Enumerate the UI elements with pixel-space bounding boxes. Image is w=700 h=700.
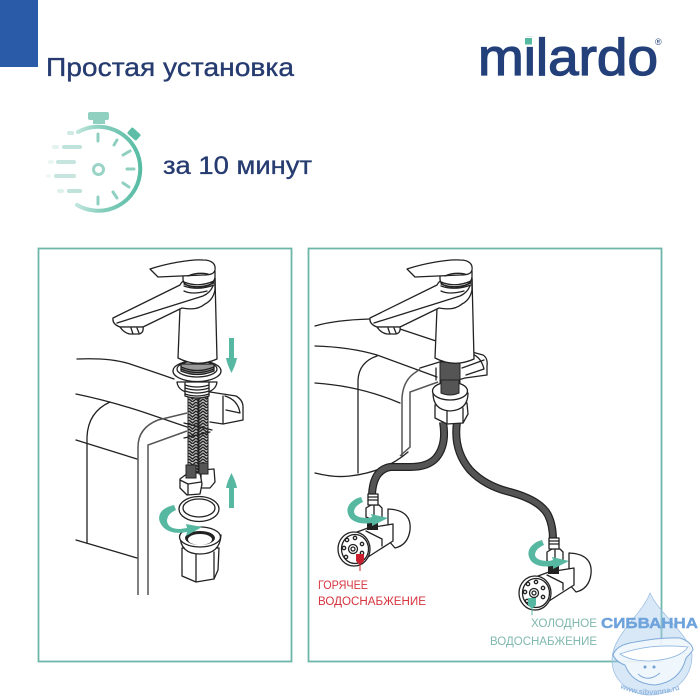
faucet	[113, 260, 217, 363]
connector nut	[432, 380, 468, 424]
arrow: down	[226, 338, 237, 373]
mounting nut	[180, 527, 221, 582]
logo: milardo: ®	[655, 37, 662, 47]
braided hoses	[372, 422, 553, 540]
sink outline	[76, 359, 187, 595]
logo: milardo: milardo	[478, 29, 658, 87]
braided hoses	[184, 397, 212, 473]
marker: hot	[356, 554, 364, 571]
hose nuts	[180, 463, 215, 495]
sink outline	[315, 319, 438, 477]
watermark name: СИБВАННА	[601, 615, 698, 632]
washer ring	[179, 496, 219, 522]
rotation arrow: cold	[528, 540, 569, 569]
label: hot water: ГОРЯЧЕЕ	[318, 580, 368, 592]
label: hot water	[318, 580, 426, 608]
panel: step 2	[308, 248, 662, 662]
valve: hot water	[338, 494, 410, 566]
marker: cold	[528, 598, 536, 615]
label: cold water	[490, 618, 597, 648]
stopwatch caption: за 10 минут	[163, 152, 313, 180]
icon: stopwatch	[48, 112, 141, 211]
blue corner square	[0, 0, 38, 67]
watermark url: www.sibvanna.ru	[620, 684, 680, 694]
title: Простая установка	[46, 52, 295, 82]
watermark tub	[613, 638, 693, 685]
mounting tray	[210, 392, 243, 424]
mounting tray	[420, 352, 487, 380]
label: cold water: ХОЛОДНОЕ	[531, 618, 597, 630]
threaded stem	[177, 382, 217, 398]
rotation arrow	[159, 505, 202, 536]
arrow: up	[226, 473, 237, 508]
flange ring	[173, 360, 221, 382]
panel: step 1	[38, 248, 292, 662]
threaded stem	[440, 362, 460, 390]
label: cold water: ВОДОСНАБЖЕНИЕ	[490, 636, 597, 648]
valve: cold water	[519, 538, 591, 610]
rotation arrow: hot	[347, 497, 388, 526]
faucet	[370, 260, 474, 363]
label: hot water: ВОДОСНАБЖЕНИЕ	[318, 596, 426, 608]
watermark: sibvanna	[601, 592, 698, 696]
watermark drop	[612, 593, 692, 695]
